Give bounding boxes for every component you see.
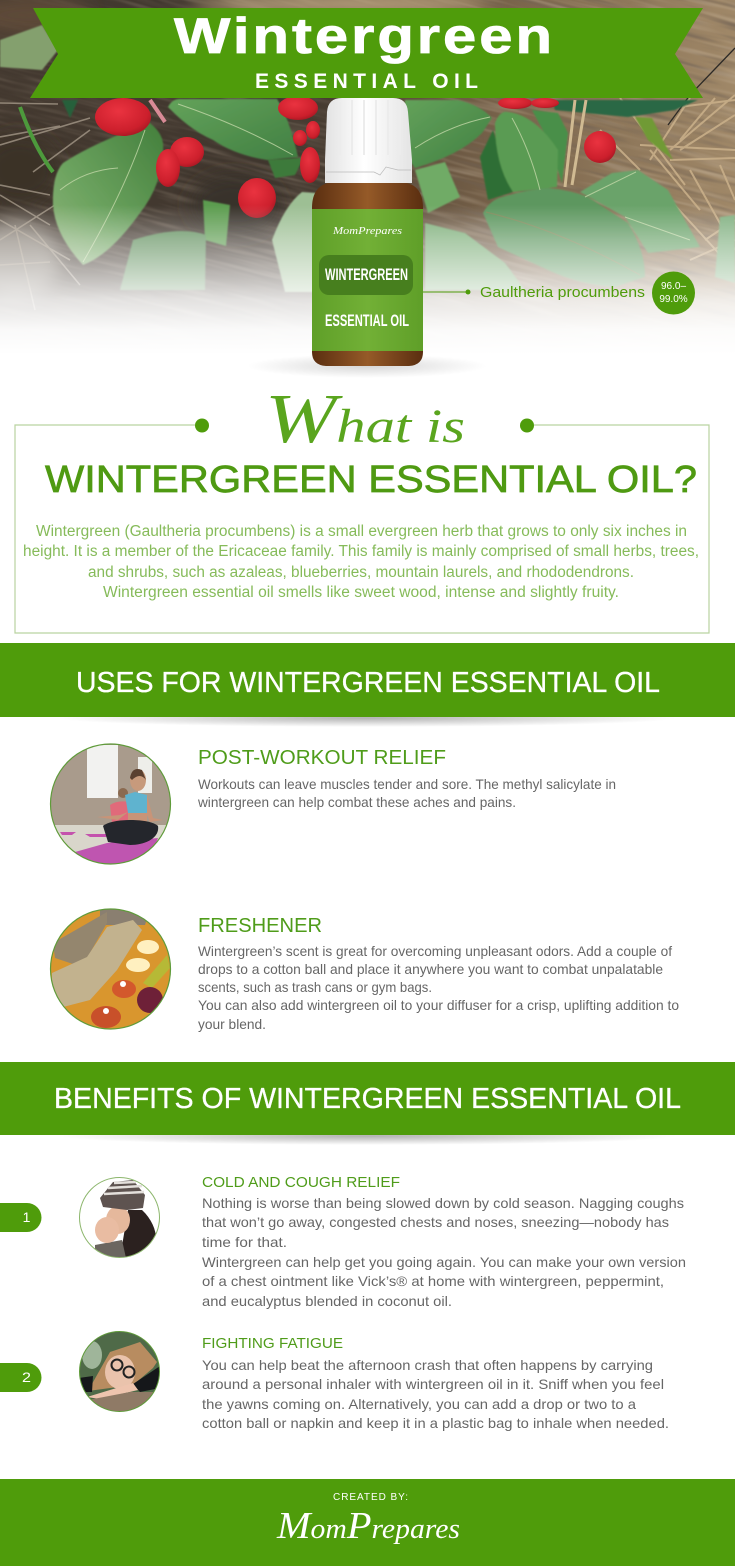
- bottle: ESSENTIAL OIL: [325, 311, 409, 330]
- footer: CREATED BY:: [333, 1492, 408, 1503]
- badge: 2: [0, 1363, 42, 1392]
- description: height. It is a member of the Ericaceae family. This family is mainly comprised of small herbs, trees,: [23, 543, 699, 560]
- bottle: WINTERGREEN: [325, 265, 408, 284]
- text: freshener: [198, 943, 679, 1032]
- footer: MomPrepares: [276, 1505, 460, 1547]
- text: fighting fatigue: cotton ball or napkin and keep it in a plastic bag to inhale when needed.: [202, 1415, 669, 1431]
- panel: what is: [15, 381, 709, 633]
- text: freshener: scents, such as trash cans or gym bags.: [198, 979, 432, 995]
- text: fighting fatigue: [202, 1357, 669, 1431]
- text: cold and cough relief: [202, 1195, 686, 1309]
- text: cold and cough relief: Wintergreen can help get you going again. You can make your own version: [202, 1254, 686, 1270]
- text: fighting fatigue: You can help beat the afternoon crash that often happens by carrying: [202, 1357, 653, 1373]
- hero photo: wintergreen plant: [0, 0, 735, 328]
- species callout: 96.0–: [661, 281, 686, 292]
- badge: 1: 1: [23, 1209, 31, 1225]
- icon: yoga photo: [50, 744, 172, 866]
- icon: sleeping woman photo: [79, 1331, 160, 1412]
- title: Wintergreen: Wintergreen: [174, 8, 555, 64]
- red berries: [95, 96, 616, 218]
- text: cold and cough relief: time for that.: [202, 1234, 287, 1250]
- text: freshener: drops to a cotton ball and place it anywhere you want to combat unpalatable: [198, 961, 663, 977]
- species callout: 99.0%: [659, 294, 688, 305]
- species callout: Gaultheria procumbens: [480, 284, 645, 301]
- text: fighting fatigue: around a personal inhaler with wintergreen oil in it. Sniff when you feel: [202, 1376, 664, 1392]
- species callout: [423, 272, 695, 314]
- text: cold and cough relief: Nothing is worse than being slowed down by cold season. Nagging coughs: [202, 1195, 684, 1211]
- heading: cold and cough relief: COLD AND COUGH RELIEF: [202, 1174, 400, 1191]
- text: fighting fatigue: the yawns coming on. Alternatively, you can add a drop or two to a: [202, 1396, 636, 1412]
- text: cold and cough relief: of a chest ointment like Vick’s® at home with wintergreen, peppermint,: [202, 1273, 664, 1289]
- footer: [0, 1479, 735, 1566]
- section band: uses: USES FOR WINTERGREEN ESSENTIAL OIL: [76, 667, 660, 699]
- description: Wintergreen (Gaultheria procumbens) is a small evergreen herb that grows to only six inches in: [36, 523, 687, 540]
- text: freshener: You can also add wintergreen oil to your diffuser for a crisp, uplifting addition to: [198, 997, 679, 1013]
- bottle: MomPrepares: [332, 225, 402, 237]
- text: freshener: your blend.: [198, 1016, 266, 1032]
- heading: post-workout relief: POST-WORKOUT RELIEF: [198, 747, 446, 769]
- badge: 2: 2: [22, 1369, 31, 1385]
- text: cold and cough relief: and eucalyptus blended in coconut oil.: [202, 1293, 452, 1309]
- title banner: ESSENTIAL OIL: [255, 70, 478, 93]
- heading: fighting fatigue: FIGHTING FATIGUE: [202, 1335, 343, 1352]
- text: post-workout relief: wintergreen can help combat these aches and pains.: [197, 794, 516, 810]
- description: [23, 523, 699, 601]
- icon: woman coughing photo: [79, 1177, 160, 1258]
- text: cold and cough relief: that won’t go away, congested chests and noses, sneezing—nobody has: [202, 1214, 669, 1230]
- section band: uses: [0, 643, 735, 727]
- bottle: [247, 98, 487, 378]
- heading: freshener: FRESHENER: [198, 915, 322, 937]
- panel: what is: WINTERGREEN ESSENTIAL OIL?: [45, 459, 697, 501]
- title banner: [30, 8, 703, 98]
- heading: What is: W hat is: [265, 381, 465, 458]
- section band: benefits: [0, 1062, 735, 1145]
- text: freshener: Wintergreen’s scent is great for overcoming unpleasant odors. Add a couple of: [198, 943, 672, 959]
- top-left leaf: [0, 25, 58, 70]
- description: Wintergreen essential oil smells like sweet wood, intense and slightly fruity.: [103, 584, 619, 601]
- text: post-workout relief: [197, 776, 616, 810]
- section band: benefits: BENEFITS OF WINTERGREEN ESSENTIAL OIL: [54, 1083, 681, 1115]
- badge: 1: [0, 1203, 42, 1232]
- icon: towels and candles photo: [50, 908, 172, 1030]
- description: and shrubs, such as azaleas, blueberries, mountain laurels, and rhododendrons.: [88, 564, 634, 581]
- text: post-workout relief: Workouts can leave muscles tender and sore. The methyl salicylate in: [198, 776, 616, 792]
